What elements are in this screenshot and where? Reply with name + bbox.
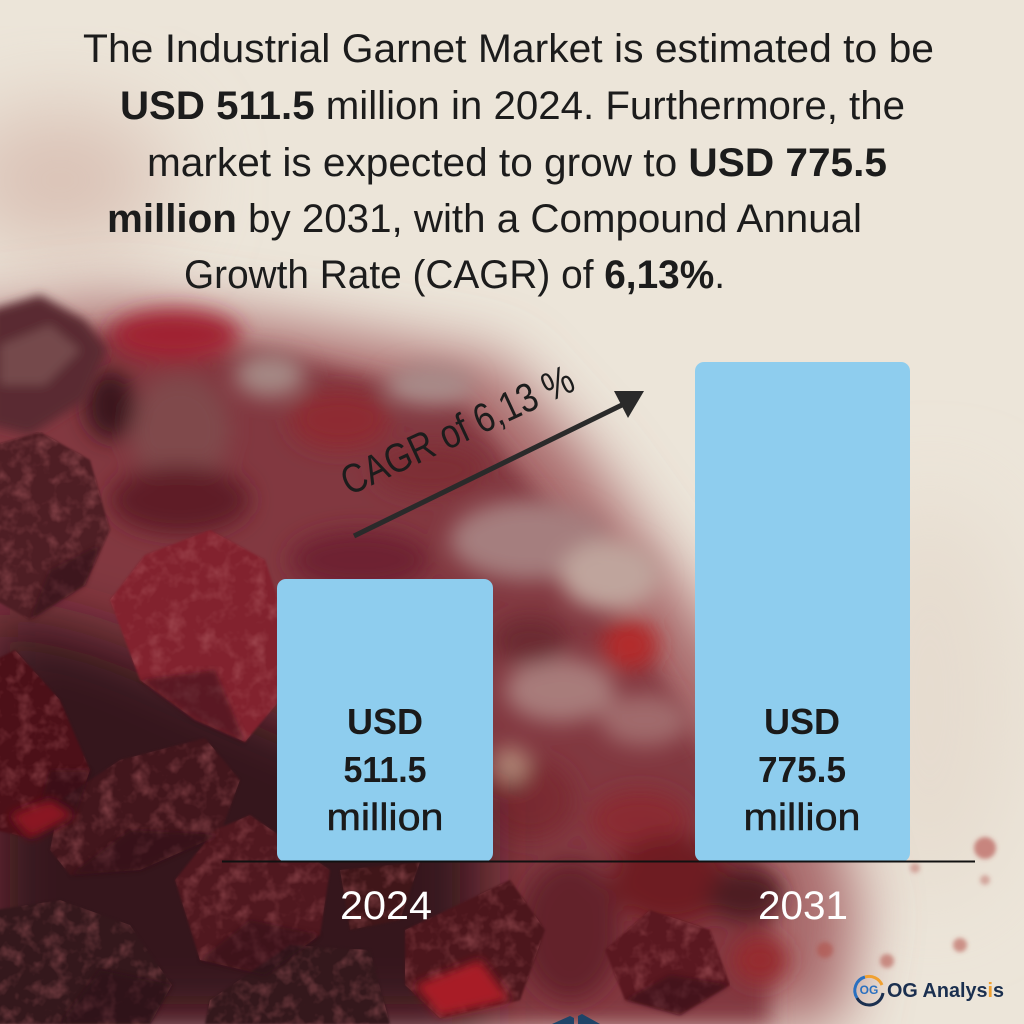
scattered fragments xyxy=(817,837,996,968)
bar: 2031: USD xyxy=(764,701,840,742)
year label 2024: 2024 xyxy=(340,884,432,928)
stone xyxy=(0,900,172,1024)
bar: 2031 xyxy=(695,362,910,862)
axis line xyxy=(222,860,975,862)
stone xyxy=(340,862,420,930)
logo: OG Analysis: OG Analysis xyxy=(887,980,1004,1002)
bar: 2024: 511.5 xyxy=(344,749,426,790)
bar: 2024 xyxy=(277,579,493,862)
stone xyxy=(405,880,545,1018)
main red stone xyxy=(110,530,285,742)
logo: OG Analysis: OG xyxy=(860,983,878,997)
logo: OG Analysis xyxy=(855,976,1004,1005)
bar: 2031: million xyxy=(744,797,860,839)
stone shading facets xyxy=(30,545,730,1024)
headline paragraph: USD 511.5 million in 2024. Furthermore, the xyxy=(120,84,905,128)
bar: 2031: 775.5 xyxy=(758,749,846,790)
stone xyxy=(0,650,90,838)
headline paragraph: The Industrial Garnet Market is estimated to be xyxy=(83,27,934,71)
arrow: growth xyxy=(354,391,644,536)
headline paragraph: million by 2031, with a Compound Annual xyxy=(107,197,862,241)
bottom navy chevron mark xyxy=(552,1014,600,1024)
stone xyxy=(605,910,730,1015)
year label 2031: 2031 xyxy=(758,884,848,928)
headline paragraph: market is expected to grow to USD 775.5 xyxy=(147,141,887,185)
bar: 2024: USD xyxy=(347,701,423,742)
stone xyxy=(205,945,390,1024)
logo ring xyxy=(855,976,883,1005)
stone xyxy=(0,432,110,620)
stone xyxy=(50,738,240,875)
blurred upper-left stones xyxy=(0,295,107,435)
CAGR label: CAGR of 6,13 % xyxy=(333,356,581,504)
stone xyxy=(175,815,330,975)
headline paragraph: Growth Rate (CAGR) of 6,13%. xyxy=(184,253,725,297)
dark gaps lower left xyxy=(0,610,480,1024)
headline paragraph xyxy=(83,27,934,297)
bar: 2024: million xyxy=(326,797,444,839)
